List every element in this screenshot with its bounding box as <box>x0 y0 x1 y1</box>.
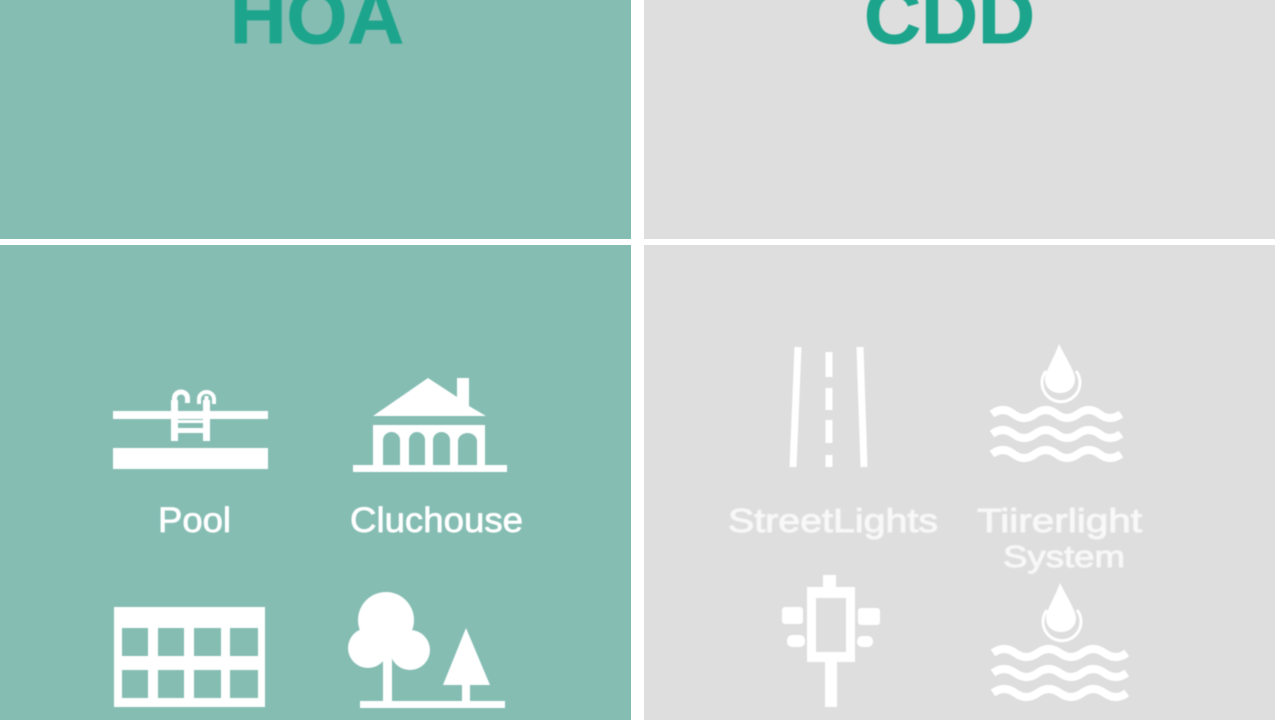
icon: water drop and waves, lower <box>993 583 1127 697</box>
icon: grid building <box>114 607 265 707</box>
label: Tiirerlight System: Tiirerlight <box>977 502 1142 539</box>
panel: HOA amenities <box>0 245 631 720</box>
label: Tiirerlight System <box>977 502 1142 574</box>
panel: CDD header <box>644 0 1275 239</box>
label: Pool: Pool <box>158 501 231 540</box>
icon: road <box>793 347 864 467</box>
panel: CDD infrastructure <box>644 245 1275 720</box>
icon: pool <box>113 392 268 469</box>
icon: clubhouse <box>353 378 507 472</box>
panel: HOA header <box>0 0 631 239</box>
panel: HOA column <box>0 0 631 720</box>
panel: CDD column <box>644 0 1275 720</box>
icon: traffic light <box>782 575 880 707</box>
icon: trees <box>348 592 505 708</box>
label: Cluchouse: Cluchouse <box>350 501 523 540</box>
label: StreetLights: StreetLights <box>728 502 938 539</box>
icon: water drop and waves <box>992 344 1121 458</box>
label: Tiirerlight System: System <box>1003 539 1125 574</box>
